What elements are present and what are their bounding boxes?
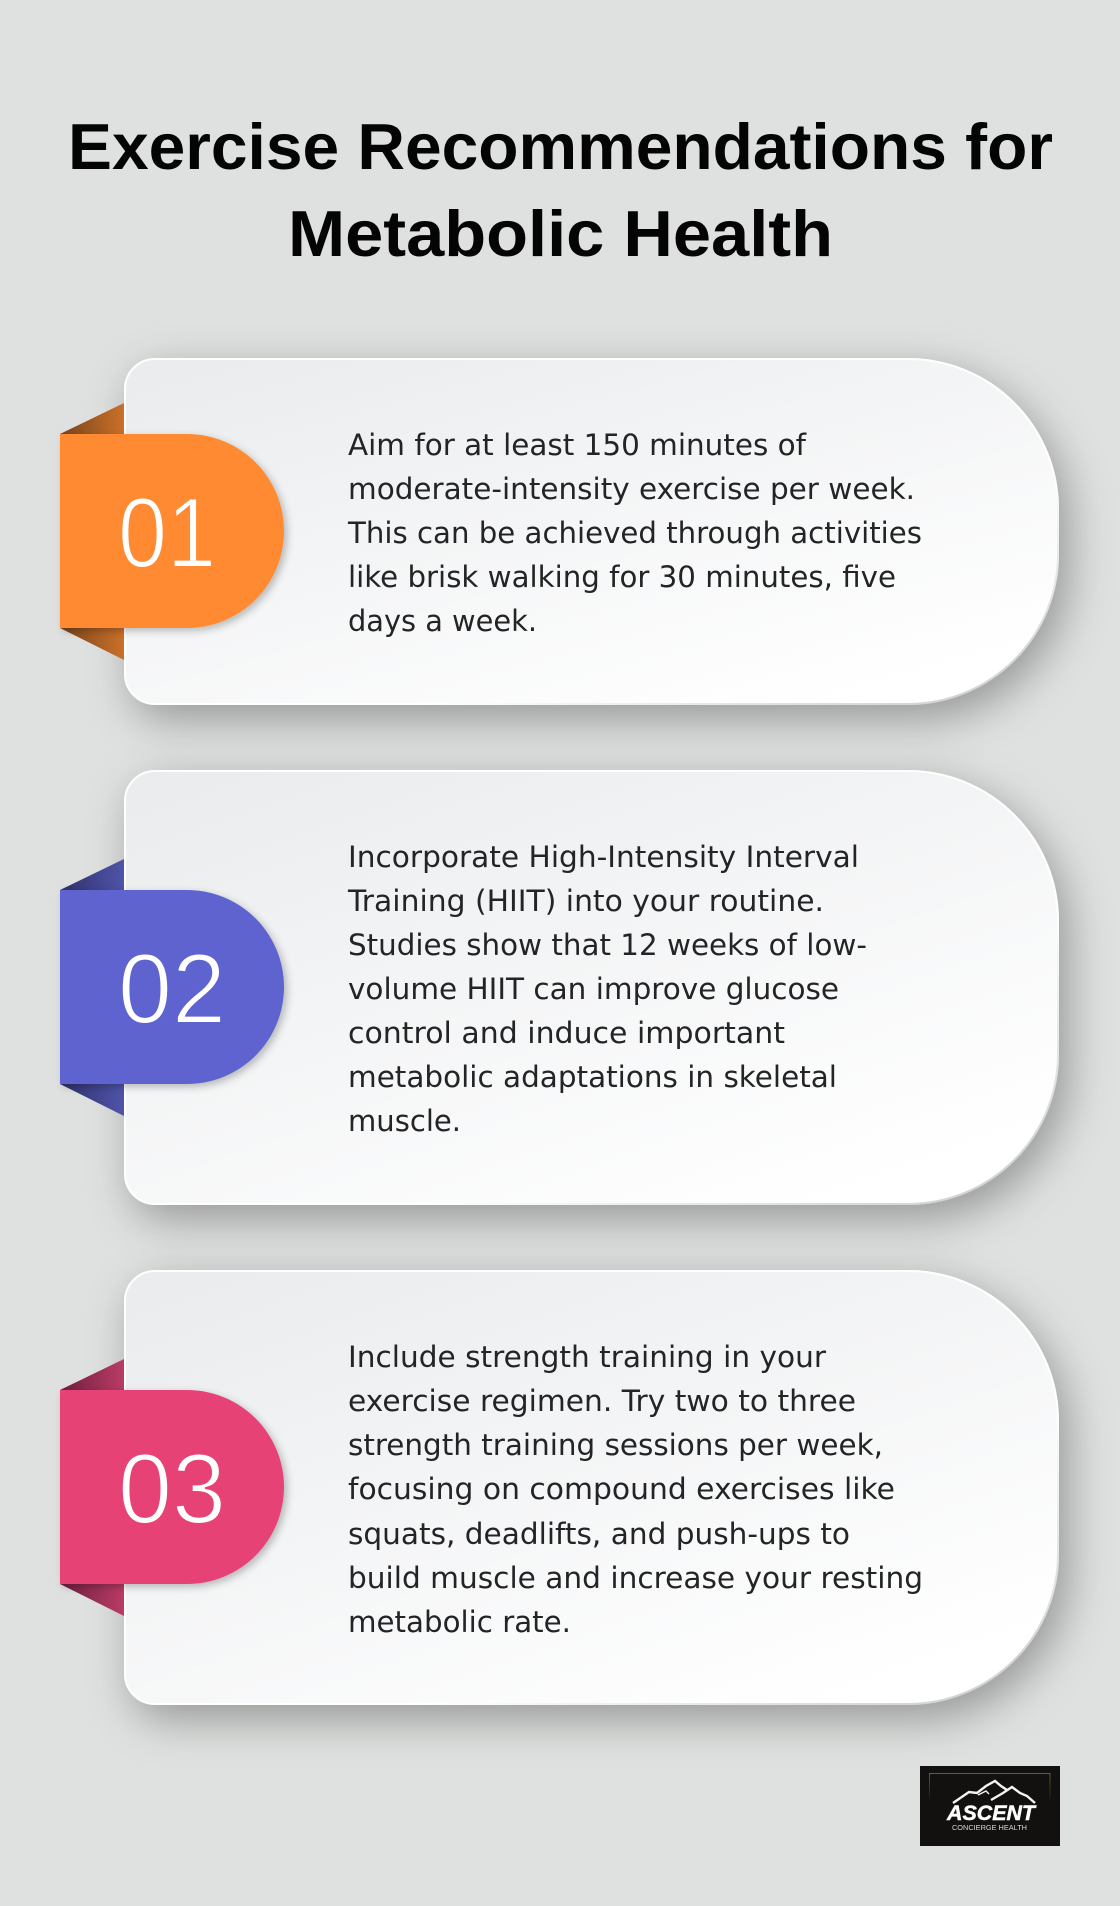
text block 03: focusing on compound exercises like <box>348 1472 895 1506</box>
panel: step 02 <box>60 771 1058 1204</box>
wordmark: ASCENT <box>946 1802 1037 1825</box>
ribbon fold top 03 <box>60 1359 124 1390</box>
text block 02: Studies show that 12 weeks of low- <box>348 928 867 962</box>
text block 03: Include strength training in your <box>348 1340 827 1374</box>
card 03 <box>125 1271 1058 1704</box>
text block 01 <box>347 428 922 638</box>
number badge 01 <box>60 434 284 628</box>
text block 02 <box>347 840 867 1138</box>
logo: Ascent Concierge Health <box>920 1766 1060 1846</box>
title: Exercise Recommendations for <box>68 110 1053 183</box>
ribbon fold bottom 03 <box>60 1584 124 1616</box>
text block 03: strength training sessions per week, <box>348 1428 883 1462</box>
ribbon fold bottom 02 <box>60 1084 124 1116</box>
number badge 02 <box>60 890 284 1084</box>
text block 02: Incorporate High-Intensity Interval <box>348 840 859 874</box>
number 03: 03 <box>118 1433 226 1544</box>
text block 01: Aim for at least 150 minutes of <box>348 428 807 462</box>
text block 03: metabolic rate. <box>348 1605 571 1639</box>
card 01 <box>125 359 1058 704</box>
ribbon fold top 01 <box>60 403 124 434</box>
number badge 03 <box>60 1390 284 1584</box>
tagline: CONCIERGE HEALTH <box>952 1823 1027 1832</box>
text block 01: like brisk walking for 30 minutes, five <box>348 560 896 594</box>
ribbon fold bottom 01 <box>60 628 124 660</box>
ribbon fold top 02 <box>60 859 124 890</box>
title: Metabolic Health <box>288 197 833 270</box>
text block 03: build muscle and increase your resting <box>348 1561 923 1595</box>
text block 01: This can be achieved through activities <box>347 516 922 550</box>
text block 02: metabolic adaptations in skeletal <box>348 1060 837 1094</box>
panel: step 03 <box>60 1271 1058 1704</box>
number 01: 01 <box>118 477 216 588</box>
panel: step 01 <box>60 359 1058 704</box>
text block 03: exercise regimen. Try two to three <box>348 1384 856 1418</box>
text block 02: muscle. <box>348 1104 461 1138</box>
card 02 <box>125 771 1058 1204</box>
text block 01: moderate-intensity exercise per week. <box>348 472 915 506</box>
text block 01: days a week. <box>348 604 537 638</box>
text block 02: volume HIIT can improve glucose <box>348 972 839 1006</box>
text block 03: squats, deadlifts, and push-ups to <box>348 1517 850 1551</box>
icon: mountains <box>953 1781 1035 1803</box>
text block 02: Training (HIIT) into your routine. <box>347 884 824 918</box>
text block 02: control and induce important <box>348 1016 785 1050</box>
number 02: 02 <box>118 933 226 1044</box>
title <box>68 110 1053 270</box>
text block 03 <box>348 1340 923 1639</box>
